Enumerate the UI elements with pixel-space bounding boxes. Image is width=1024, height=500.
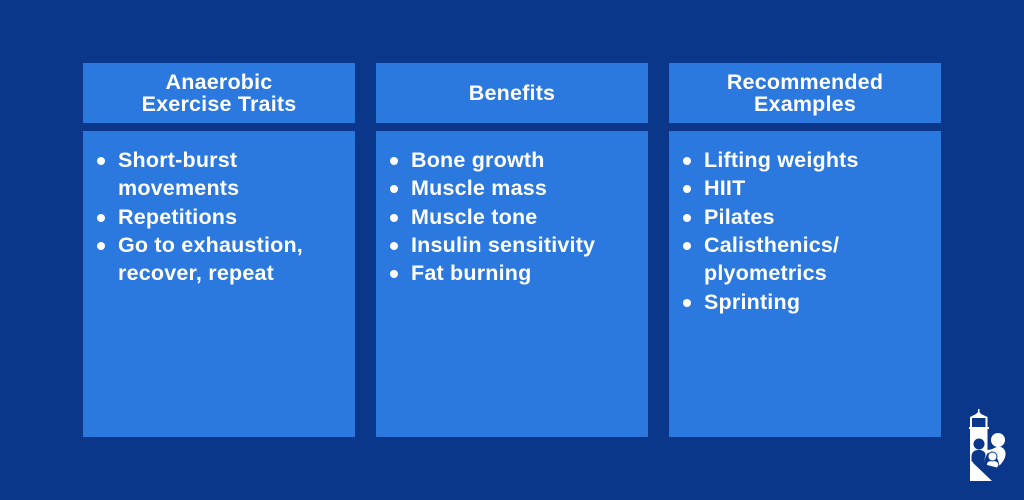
icon detail: child head — [988, 452, 998, 462]
list item: go to exhaustion, recover, repeat: Go to exhaustion, — [118, 233, 303, 257]
list item: short-burst movements: Short-burst — [118, 148, 237, 172]
list item: short-burst movements: movements — [118, 176, 239, 200]
list item: calisthenics/plyometrics: Calisthenics/ — [704, 233, 839, 257]
list item: fat burning: Fat burning — [411, 261, 531, 285]
panel: recommended examples heading — [669, 63, 941, 123]
heading text: benefits: Benefits — [469, 81, 555, 105]
list item: lifting weights: Lifting weights — [704, 148, 859, 172]
icon: lighthouse and family logo — [969, 409, 1006, 481]
panel: benefits list — [376, 131, 648, 437]
list item: insulin sensitivity: Insulin sensitivity — [411, 233, 595, 257]
panel: recommended examples list — [669, 131, 941, 437]
list item: calisthenics/plyometrics: plyometrics — [704, 261, 827, 285]
panel: anaerobic exercise traits heading — [83, 63, 355, 123]
heading text: recommended examples: Recommended — [727, 70, 883, 94]
list item: pilates: Pilates — [704, 205, 775, 229]
heading text: anaerobic exercise traits: Exercise Traits — [142, 92, 296, 116]
heading text: recommended examples — [727, 70, 883, 116]
heading text: recommended examples: Examples — [754, 92, 856, 116]
list item: go to exhaustion, recover, repeat: recover, repeat — [118, 261, 274, 285]
list item: sprinting: Sprinting — [704, 290, 800, 314]
list item: muscle mass: Muscle mass — [411, 176, 547, 200]
list item: go to exhaustion, recover, repeat — [118, 233, 303, 285]
list item: repetitions: Repetitions — [118, 205, 237, 229]
list item: calisthenics/plyometrics — [704, 233, 839, 285]
heading text: anaerobic exercise traits: Anaerobic — [166, 70, 272, 94]
panel: benefits heading — [376, 63, 648, 123]
heading text: anaerobic exercise traits — [142, 70, 296, 116]
list item: bone growth: Bone growth — [411, 148, 545, 172]
list item: muscle tone: Muscle tone — [411, 205, 537, 229]
list item: short-burst movements — [118, 148, 239, 200]
list item: HIIT: HIIT — [704, 176, 745, 200]
panel: anaerobic exercise traits list — [83, 131, 355, 437]
